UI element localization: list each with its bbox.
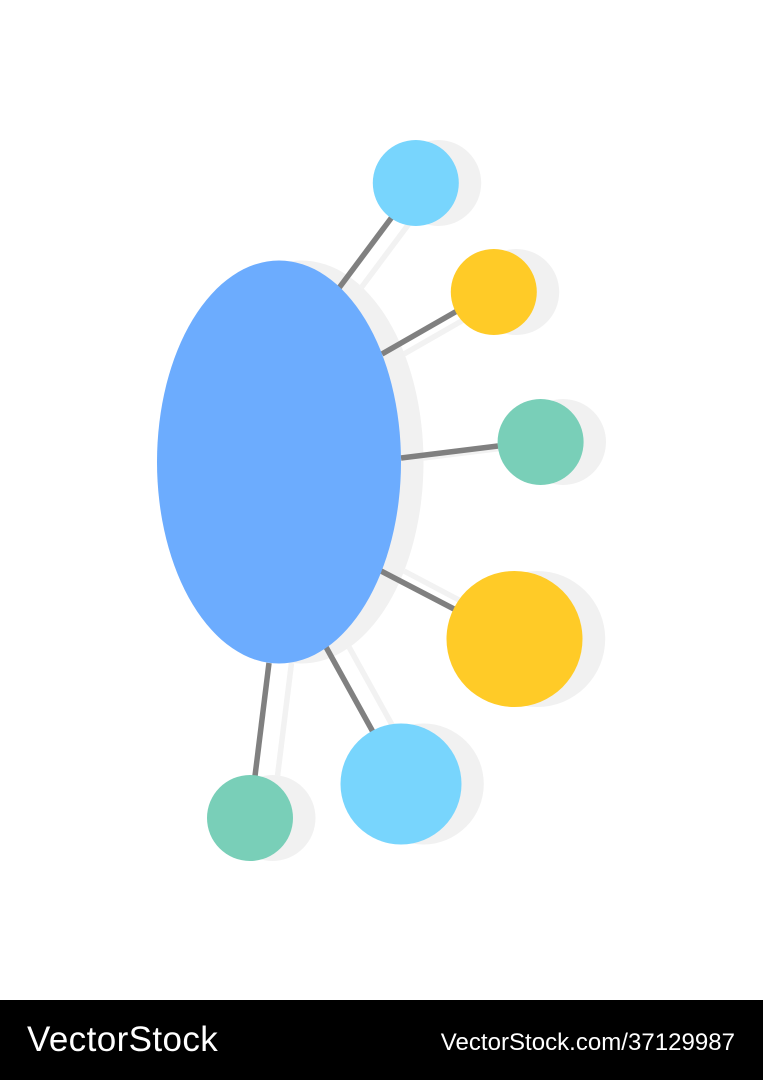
node: top light blue circle [373, 140, 459, 226]
connector lines [255, 217, 498, 776]
shadow layer [180, 140, 606, 861]
node: large light blue circle [340, 724, 462, 844]
node: large yellow circle [446, 571, 582, 707]
watermark footer bar [0, 1000, 763, 1080]
node: middle green circle [498, 399, 584, 485]
node: upper yellow circle [451, 249, 537, 335]
central blue ellipse [157, 260, 401, 664]
image id: VectorStock.com/37129987 [441, 1029, 735, 1056]
node: bottom green circle [207, 775, 293, 861]
brand name: VectorStock [27, 1020, 218, 1059]
